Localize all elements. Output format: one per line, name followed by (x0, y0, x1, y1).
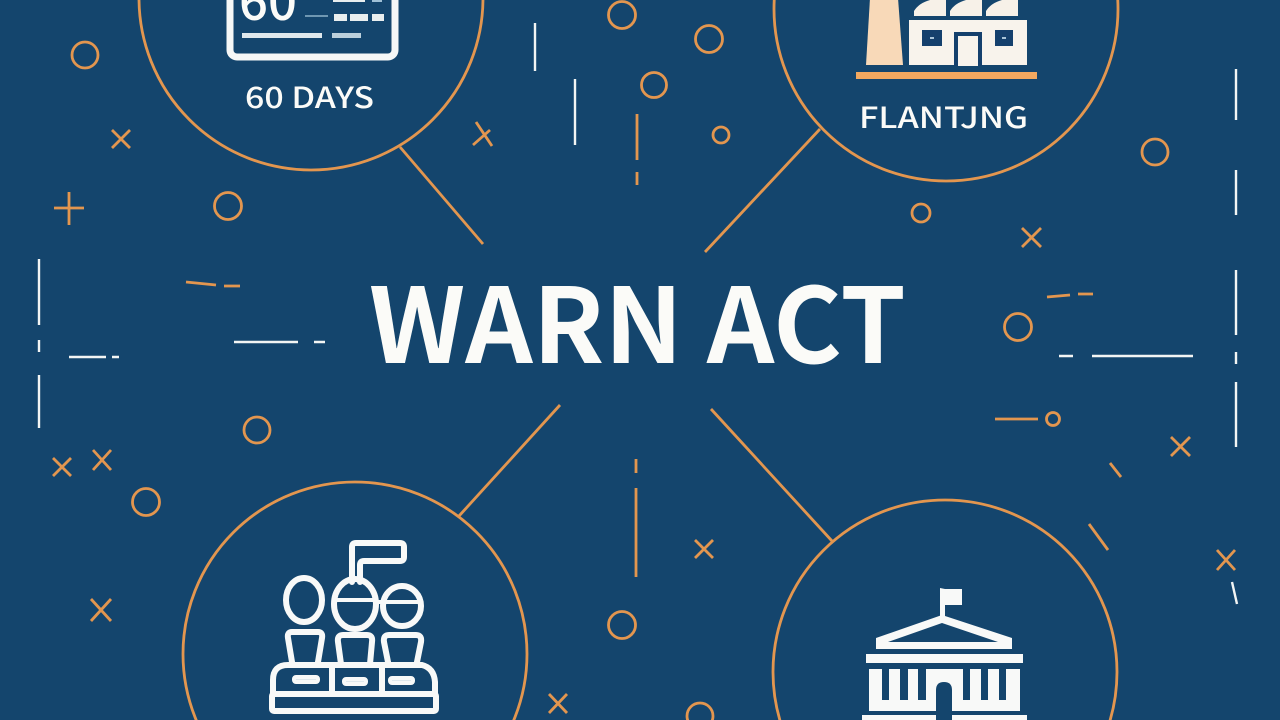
icon: meeting group (272, 543, 436, 711)
decorative orange dashes (186, 114, 1121, 577)
connector: government (711, 409, 832, 541)
label: planning: FLANTJNG (859, 95, 1028, 137)
decorative white dashes (39, 23, 1237, 604)
icon: capitol building (862, 588, 1027, 720)
title: WARN ACT (369, 242, 906, 393)
connector: planning (705, 129, 820, 252)
decorative crosses (53, 122, 1235, 713)
circle: 60 days (139, 0, 483, 170)
panel: 60 days (139, 0, 483, 244)
circle: employees (183, 482, 527, 720)
icon: factory (856, 0, 1037, 79)
panel: employees (183, 405, 560, 720)
panel: planning (705, 0, 1118, 252)
label: 60 days: 60 DAYS (245, 75, 374, 117)
circle: planning (774, 0, 1118, 181)
icon: calendar notice (230, 0, 395, 57)
circle: government (773, 500, 1117, 720)
connector: 60 days (400, 147, 483, 244)
connector: employees (459, 405, 560, 516)
panel: government (711, 409, 1117, 720)
